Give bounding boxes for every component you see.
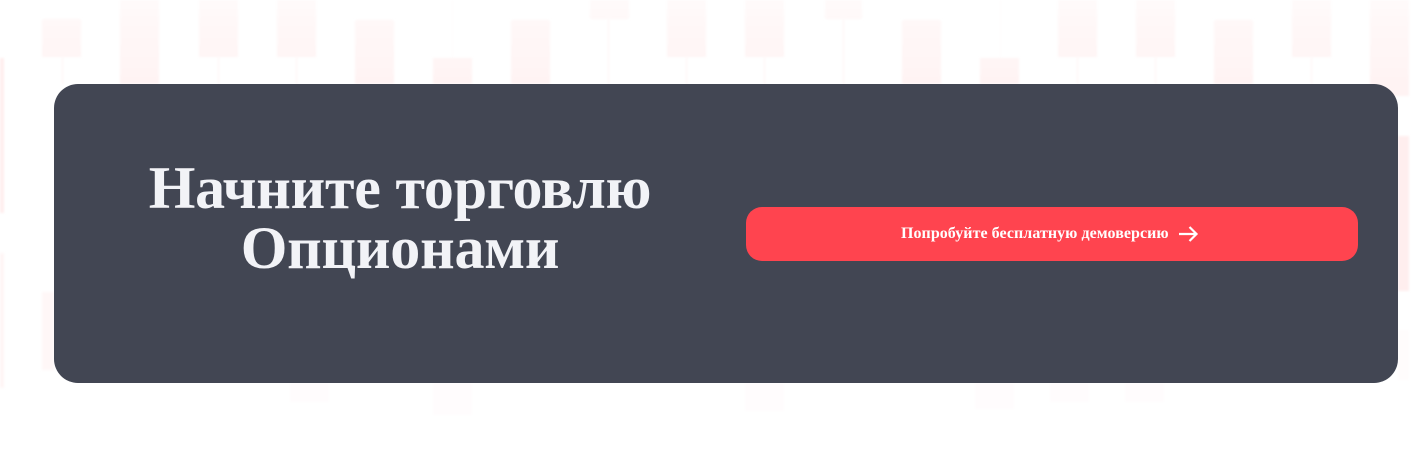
button: free demo [746,207,1358,261]
icon: right arrow [1179,226,1198,242]
button label: Попробуйте бесплатную демоверсию [901,225,1169,242]
heading: Начните торговлю [149,155,651,221]
heading [149,155,651,281]
heading: Опционами [241,215,559,281]
panel: call to action card [54,84,1398,383]
